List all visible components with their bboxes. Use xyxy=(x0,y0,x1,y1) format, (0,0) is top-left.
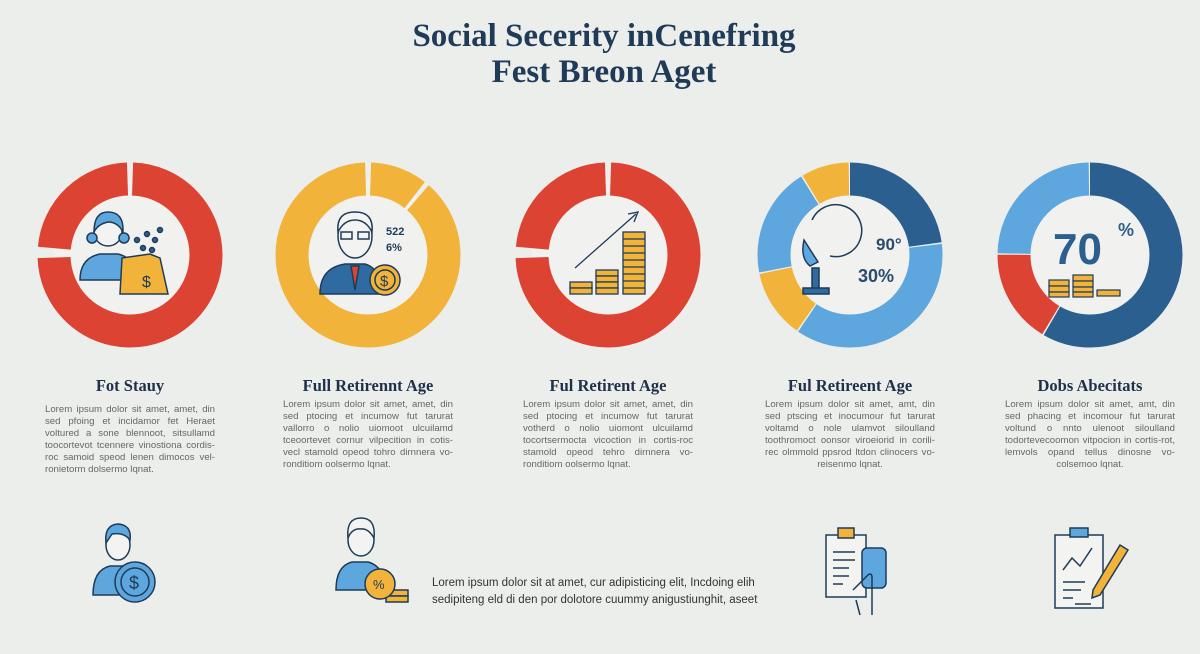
icon: woman with money bag xyxy=(80,212,168,294)
bottom text block xyxy=(432,577,758,606)
bottom text block: Lorem ipsum dolor sit at amet, cur adipisticing elit, Incdoing elih xyxy=(432,577,755,589)
icon: person with dollar coin xyxy=(93,524,155,602)
bottom text block: sedipiteng eld di den por dolotore cuummy anigustiunghit, aseet xyxy=(432,594,758,606)
donut 3: red xyxy=(532,179,684,331)
donut 1: red xyxy=(54,179,206,331)
panel: Ful Retirent Age: Ful Retirent Age xyxy=(549,376,666,395)
icon: person with dollar coin: $ xyxy=(129,573,139,593)
icon: man with coin: $ xyxy=(380,273,389,290)
panel: Ful Retirent Age: Lorem ipsum dolor sit amet, amet, din sed ptocing et incumow fut tarurat votherd o nolio uiomont ulcuilamd tocortsermocta vicoction in cortis-roc stamold opeod tehro dirnnera vo-ronditiom oolsermo lqnat. xyxy=(523,399,693,470)
icon: clipboard with hand xyxy=(826,528,886,615)
icon: 70 percent: 70 xyxy=(1053,225,1102,274)
title: Fest Breon Aget xyxy=(492,54,716,90)
icon: growth chart with coin stacks xyxy=(570,212,645,294)
icon: lamp with percentages: 30% xyxy=(858,266,894,286)
icon: person with percent coins: % xyxy=(373,577,385,592)
panel: Full Retirennt Age: Lorem ipsum dolor sit amet, amet, din sed ptocing et incumow fut tarurat vallorro o nolio uiomoot ulcuilamd tceoortevet cornur vilpecition in cotis-vecl stamold opeod tohro dirnnera vo-ronditiom oolsermo lqnat. xyxy=(283,399,453,470)
icon: woman with money bag: $ xyxy=(142,274,151,291)
donut charts xyxy=(38,162,1182,348)
icon: lamp with percentages: 90° xyxy=(876,235,902,254)
title: Social Secerity inCenefring xyxy=(412,18,796,54)
icon: man with coin xyxy=(320,212,404,295)
icon: 70 percent xyxy=(1049,220,1134,297)
icon: lamp with percentages xyxy=(803,205,902,294)
panel: Full Retirennt Age: Full Retirennt Age xyxy=(303,376,433,395)
panel: Ful Retireent Age: Ful Retireent Age xyxy=(788,376,912,395)
panel: Dobs Abecitats: Dobs Abecitats xyxy=(1038,376,1142,395)
icon: 70 percent: % xyxy=(1118,220,1134,240)
donut 2: yellow xyxy=(292,179,444,331)
icon: person with percent coins xyxy=(336,518,408,602)
panel: Dobs Abecitats: Lorem ipsum dolor sit amet, amt, din sed phacing et incomour fut tarurat voltund o nnto ulenoot siloulland todortevecoomon vitpocion in cortis-rot, lemvols opand tellus dinosne vo-colsemoo lqnat. xyxy=(1005,399,1175,470)
panel: Ful Retireent Age: Lorem ipsum dolor sit amet, amt, din sed ptscing et inocumour fut tarurat voltamd o nole ulamvot siloulland toothromoct oonsor viroeiorid in corili-rec olmmold ppsrod ltdon clinocers vo-reisenmo lqnat. xyxy=(765,399,935,470)
title xyxy=(412,18,796,90)
panel: Fot Stauy: Lorem ipsum dolor sit amet, amet, din sed pfoing et incidamor fet Heraet voltured a sone blennoot, sitsullamd toocortevot tcennere vinostiona cordis-roc samoid speod lenen dimocos vel-ronietorm dolsermo lqnat. xyxy=(45,404,215,475)
bottom icons xyxy=(92,517,1129,616)
icon: man with coin: 522 xyxy=(386,226,404,238)
panel: Fot Stauy: Fot Stauy xyxy=(96,376,164,395)
donut 4: blue/yellow xyxy=(774,179,926,331)
icon: report with pencil xyxy=(1055,528,1128,608)
icon: man with coin: 6% xyxy=(386,242,402,254)
donut 5: blue/red xyxy=(1014,179,1166,331)
